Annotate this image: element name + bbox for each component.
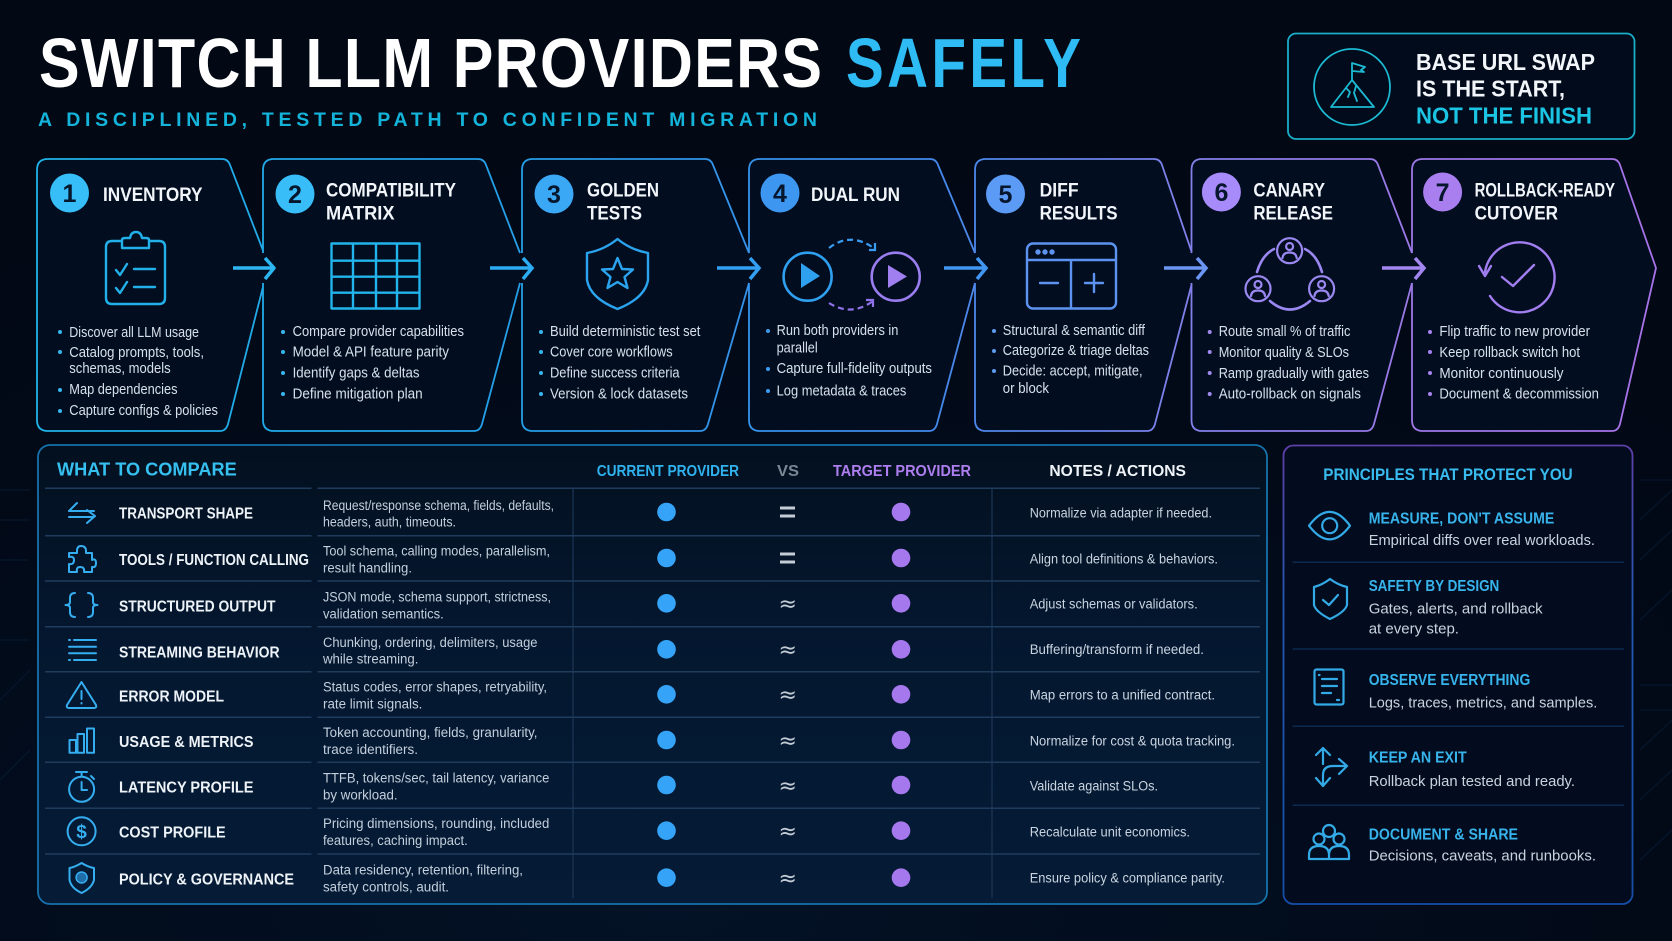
heading: CUTOVER — [1475, 203, 1558, 225]
bullets — [539, 324, 700, 403]
heading — [1253, 180, 1333, 225]
title: SAFELY — [846, 24, 1081, 102]
row: policy and governance: POLICY & GOVERNANCE — [119, 871, 294, 888]
step number 2 — [276, 174, 314, 214]
callout: base url swap: NOT THE FINISH — [1416, 102, 1592, 128]
heading: RELEASE — [1253, 203, 1333, 225]
bullets: Cover core workflows — [550, 345, 673, 361]
bullets: Monitor quality & SLOs — [1219, 345, 1349, 361]
row: streaming behavior: while streaming. — [322, 652, 418, 667]
bullets: Discover all LLM usage — [69, 325, 199, 341]
principle: document and share: DOCUMENT & SHARE — [1369, 826, 1518, 843]
bullets: Capture full-fidelity outputs — [777, 361, 932, 377]
panel: step 3 golden tests — [522, 159, 749, 431]
row: latency profile: TTFB, tokens/sec, tail latency, variance — [323, 770, 549, 785]
principle: safety: SAFETY BY DESIGN — [1369, 578, 1499, 595]
bullets: Capture configs & policies — [69, 403, 218, 419]
heading: GOLDEN — [587, 180, 659, 202]
row: usage and metrics: Token accounting, fields, granularity, — [323, 725, 538, 740]
row: usage and metrics: ≈ — [778, 729, 797, 754]
row: latency profile: Validate against SLOs. — [1030, 779, 1158, 794]
panel: step 4 dual run — [749, 159, 975, 431]
callout: base url swap — [1288, 34, 1634, 139]
panel: step 7 rollback-ready cutover — [1412, 159, 1656, 431]
heading — [587, 180, 659, 225]
panel: what to compare table — [38, 445, 1267, 904]
heading: CANARY — [1253, 180, 1325, 202]
bullets: Run both providers in — [777, 323, 898, 339]
arrow: step 4 to 5 — [944, 258, 986, 279]
step number 1: 1 — [63, 180, 77, 208]
principle: safety — [1314, 578, 1543, 637]
arrow: step 3 to 4 — [717, 258, 759, 279]
bullets — [281, 324, 464, 403]
principle: keep an exit: KEEP AN EXIT — [1369, 749, 1467, 766]
step number 7: 7 — [1436, 179, 1450, 207]
step number 1 — [50, 174, 89, 212]
row: transport shape: TRANSPORT SHAPE — [119, 505, 253, 522]
step number 3 — [534, 174, 574, 214]
bullets: Log metadata & traces — [777, 384, 906, 400]
row: policy and governance: ≈ — [778, 866, 797, 892]
row: tools / function calling: Tool schema, calling modes, parallelism, — [323, 544, 550, 559]
bullets: Define mitigation plan — [293, 387, 423, 403]
icon: diff window — [1027, 244, 1116, 308]
icon: rollback check — [1479, 242, 1555, 312]
row: streaming behavior: STREAMING BEHAVIOR — [119, 644, 280, 661]
bullets: Build deterministic test set — [550, 324, 700, 340]
bullets: Auto-rollback on signals — [1219, 387, 1361, 403]
principle: observe — [1314, 670, 1597, 711]
row: tools / function calling — [69, 544, 1218, 575]
step number 7 — [1423, 172, 1462, 212]
bullets: Catalog prompts, tools, — [69, 345, 204, 361]
arrow: step 2 to 3 — [490, 258, 532, 279]
row: streaming behavior: Chunking, ordering, delimiters, usage — [323, 635, 538, 650]
row: error model: ERROR MODEL — [119, 688, 224, 705]
bullets: Flip traffic to new provider — [1439, 324, 1590, 340]
bullets: Map dependencies — [69, 382, 178, 398]
row: structured output: Adjust schemas or validators. — [1030, 597, 1198, 612]
subtitle: A DISCIPLINED, TESTED PATH TO CONFIDENT MIGRATION — [38, 109, 817, 131]
heading: DIFF — [1040, 180, 1079, 202]
step number 3: 3 — [547, 181, 561, 209]
row: cost profile — [68, 816, 1190, 848]
step number 4: 4 — [773, 180, 787, 208]
bullets: parallel — [777, 340, 818, 356]
bullets: Route small % of traffic — [1219, 324, 1350, 340]
row: cost profile: ≈ — [778, 820, 797, 844]
principle: measure: Empirical diffs over real workloads. — [1369, 532, 1595, 549]
row: structured output — [66, 589, 1198, 621]
row: transport shape: Request/response schema, fields, defaults, — [323, 498, 554, 513]
table header: CURRENT PROVIDER — [597, 463, 739, 480]
row: usage and metrics: USAGE & METRICS — [119, 734, 254, 751]
row: streaming behavior: Buffering/transform if needed. — [1030, 642, 1204, 657]
row: cost profile: $ — [76, 822, 87, 843]
row: structured output: ≈ — [778, 592, 797, 617]
icon: shield star — [587, 239, 648, 309]
panel: step 2 compatibility matrix — [263, 159, 520, 431]
row: streaming behavior: ≈ — [778, 638, 797, 663]
row: tools / function calling: result handling. — [323, 560, 412, 575]
bullets: schemas, models — [69, 361, 171, 377]
row: transport shape: headers, auth, timeouts. — [323, 515, 456, 530]
step number 5: 5 — [999, 181, 1013, 209]
row: cost profile: features, caching impact. — [323, 833, 468, 848]
row: structured output: JSON mode, schema support, strictness, — [323, 589, 551, 604]
panel: principles that protect you — [1284, 446, 1632, 904]
row: latency profile — [69, 770, 1158, 802]
row: tools / function calling: Align tool definitions & behaviors. — [1030, 551, 1218, 566]
bullets — [992, 323, 1149, 397]
panel: step 6 canary release — [1192, 159, 1412, 431]
principle: keep an exit — [1316, 748, 1575, 790]
step number 4 — [760, 174, 800, 212]
principle: safety: at every step. — [1369, 620, 1459, 637]
table header: WHAT TO COMPARE — [57, 459, 237, 480]
row: latency profile: LATENCY PROFILE — [119, 780, 254, 797]
row: error model: Map errors to a unified contract. — [1030, 688, 1215, 703]
bullets: Define success criteria — [550, 366, 680, 382]
bullets — [1428, 324, 1599, 403]
row: policy and governance — [70, 862, 1225, 894]
bullets: Keep rollback switch hot — [1439, 345, 1580, 361]
bullets: Model & API feature parity — [293, 345, 450, 361]
principle: document and share — [1309, 825, 1596, 865]
icon: mountain with flag — [1314, 49, 1390, 125]
row: usage and metrics: Normalize for cost & quota tracking. — [1030, 733, 1235, 748]
principle: measure — [1309, 510, 1595, 549]
bullets — [766, 323, 932, 400]
icon: clipboard checklist — [106, 232, 165, 304]
row: transport shape: Normalize via adapter if needed. — [1030, 505, 1212, 520]
table header: NOTES / ACTIONS — [1049, 463, 1186, 480]
row: cost profile: COST PROFILE — [119, 824, 226, 841]
table header: VS — [777, 463, 799, 480]
title: SWITCH LLM PROVIDERS — [39, 24, 822, 102]
step number 6 — [1202, 172, 1241, 212]
row: policy and governance: Ensure policy & compliance parity. — [1030, 870, 1225, 885]
row: latency profile: ≈ — [778, 774, 797, 799]
icon: matrix grid — [332, 244, 420, 308]
bullets: or block — [1003, 381, 1050, 397]
row: error model — [67, 680, 1215, 712]
heading — [1475, 180, 1615, 225]
principle: observe: Logs, traces, metrics, and samples. — [1369, 694, 1597, 711]
row: usage and metrics: trace identifiers. — [323, 742, 418, 757]
step number 2: 2 — [288, 181, 302, 209]
row: policy and governance: Data residency, retention, filtering, — [323, 862, 523, 877]
row: error model: ≈ — [778, 683, 797, 708]
heading: RESULTS — [1040, 203, 1118, 225]
row: cost profile: Recalculate unit economics. — [1030, 824, 1190, 839]
step number 5 — [986, 174, 1025, 214]
row: structured output: STRUCTURED OUTPUT — [119, 599, 276, 616]
heading — [1040, 180, 1118, 225]
arrow: step 6 to 7 — [1382, 258, 1424, 279]
icon: canary group — [1246, 238, 1334, 310]
bullets — [1208, 324, 1369, 403]
icon: dual run play circles — [784, 240, 920, 310]
panel: step 5 diff results — [975, 159, 1192, 431]
principle: observe: OBSERVE EVERYTHING — [1369, 672, 1530, 689]
bullets — [58, 325, 218, 419]
bullets: Ramp gradually with gates — [1219, 366, 1369, 382]
table header — [57, 459, 1186, 480]
principle: keep an exit: Rollback plan tested and ready. — [1369, 773, 1575, 790]
heading: COMPATIBILITY — [326, 180, 456, 202]
principle: safety: Gates, alerts, and rollback — [1369, 600, 1543, 617]
principle: measure: MEASURE, DON'T ASSUME — [1369, 510, 1554, 527]
bullets: Decide: accept, mitigate, — [1003, 364, 1142, 380]
row: cost profile: Pricing dimensions, rounding, included — [323, 816, 549, 831]
table header: TARGET PROVIDER — [833, 463, 971, 480]
bullets: Document & decommission — [1439, 387, 1599, 403]
callout: base url swap: IS THE START, — [1416, 76, 1565, 102]
row: transport shape — [69, 498, 1212, 530]
row: latency profile: by workload. — [323, 787, 398, 802]
callout: base url swap: BASE URL SWAP — [1416, 49, 1595, 75]
arrow: step 1 to 2 — [233, 258, 274, 279]
step number 6: 6 — [1214, 179, 1228, 207]
bullets: Compare provider capabilities — [293, 324, 464, 340]
arrow: step 5 to 6 — [1164, 258, 1206, 279]
heading: MATRIX — [326, 203, 394, 225]
bullets: Monitor continuously — [1439, 366, 1564, 382]
panel: step 1 inventory — [37, 159, 264, 431]
heading — [326, 180, 456, 225]
heading: INVENTORY — [103, 184, 202, 206]
row: usage and metrics — [70, 725, 1235, 757]
bullets: Identify gaps & deltas — [293, 366, 420, 382]
heading: DUAL RUN — [811, 184, 900, 206]
heading: ROLLBACK-READY — [1475, 180, 1615, 202]
row: streaming behavior — [69, 635, 1204, 667]
principle: document and share: Decisions, caveats, and runbooks. — [1369, 848, 1596, 865]
row: structured output: validation semantics. — [323, 606, 444, 621]
principles heading: PRINCIPLES THAT PROTECT YOU — [1323, 466, 1573, 484]
heading: TESTS — [587, 203, 642, 225]
row: error model: rate limit signals. — [323, 697, 422, 712]
row: tools / function calling: TOOLS / FUNCTION CALLING — [119, 552, 309, 569]
row: error model: Status codes, error shapes, retryability, — [323, 680, 547, 695]
bullets: Version & lock datasets — [550, 387, 688, 403]
row: policy and governance: safety controls, audit. — [323, 879, 449, 894]
bullets: Structural & semantic diff — [1003, 323, 1146, 339]
bullets: Categorize & triage deltas — [1003, 343, 1149, 359]
